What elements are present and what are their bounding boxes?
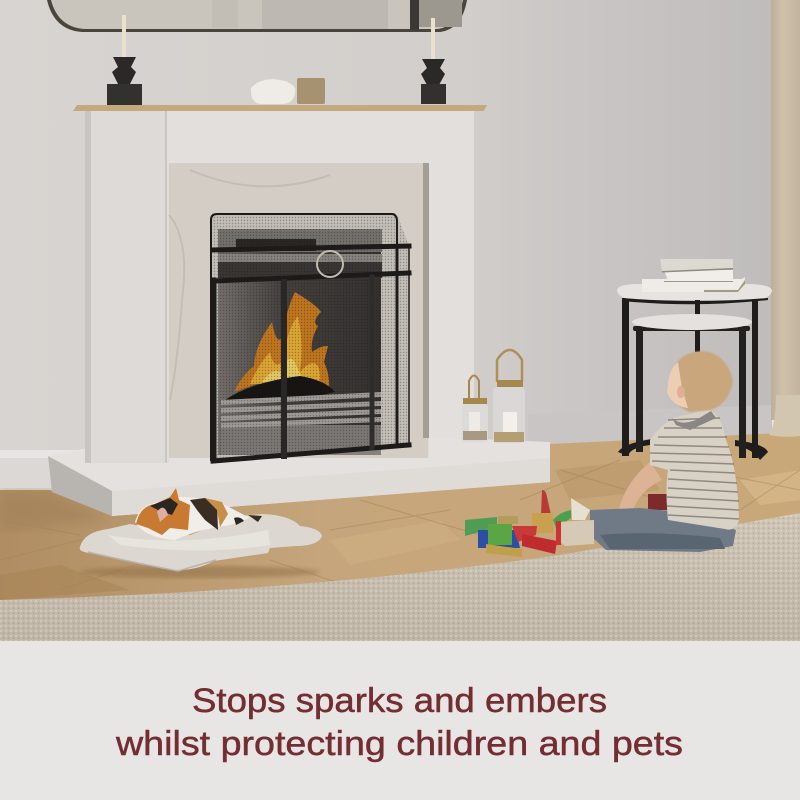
rug texture bbox=[0, 513, 800, 641]
gold pot ornament bbox=[297, 78, 325, 104]
ear bbox=[677, 386, 685, 398]
shoes bbox=[556, 498, 594, 546]
stove top panel bbox=[218, 229, 382, 278]
small table top bbox=[632, 314, 752, 330]
ring handle bbox=[317, 251, 343, 277]
nesting tables bbox=[617, 259, 772, 460]
hearth bbox=[48, 437, 550, 516]
curtain bbox=[769, 0, 800, 437]
large table top bbox=[617, 284, 772, 304]
jeans bbox=[590, 508, 736, 552]
cat bed bbox=[80, 514, 322, 578]
collar bbox=[672, 411, 716, 430]
stripes bbox=[650, 418, 739, 519]
face bbox=[667, 362, 688, 408]
candle holder left bbox=[107, 15, 142, 105]
skirting board bbox=[0, 405, 772, 492]
logs bbox=[222, 376, 335, 404]
mantel shelf bbox=[73, 105, 487, 111]
child bbox=[556, 351, 739, 552]
fireplace surround bbox=[85, 111, 474, 463]
large lantern bbox=[493, 350, 525, 443]
white bowl ornament bbox=[251, 79, 295, 104]
caption line 2: whilst protecting children and pets bbox=[115, 725, 683, 763]
fire guard bbox=[211, 213, 409, 462]
wall bbox=[0, 0, 772, 450]
stove lower panel bbox=[221, 425, 381, 455]
toy blocks bbox=[465, 490, 571, 557]
head bbox=[669, 351, 733, 412]
black frame bbox=[211, 214, 409, 461]
flames bbox=[234, 292, 329, 392]
small lantern bbox=[462, 376, 488, 442]
wood floor herringbone bbox=[0, 460, 800, 600]
firebox interior bbox=[218, 240, 381, 455]
caption line 1: Stops sparks and embers bbox=[192, 682, 607, 720]
mirror bbox=[47, 0, 467, 32]
rug bbox=[0, 513, 800, 641]
floor bbox=[0, 432, 800, 640]
stove bars bbox=[221, 392, 381, 428]
back arm bbox=[618, 462, 662, 515]
t-shirt bbox=[650, 410, 739, 530]
caption text bbox=[115, 682, 683, 763]
caption band bbox=[0, 641, 800, 800]
small table legs bbox=[633, 326, 750, 458]
cat bbox=[135, 488, 262, 540]
mesh screen bbox=[211, 213, 409, 462]
stacked books bbox=[642, 259, 745, 292]
candle holder right bbox=[421, 18, 446, 104]
large table legs bbox=[618, 298, 768, 460]
marble insert bbox=[169, 163, 429, 458]
red toy behind bbox=[648, 494, 670, 510]
